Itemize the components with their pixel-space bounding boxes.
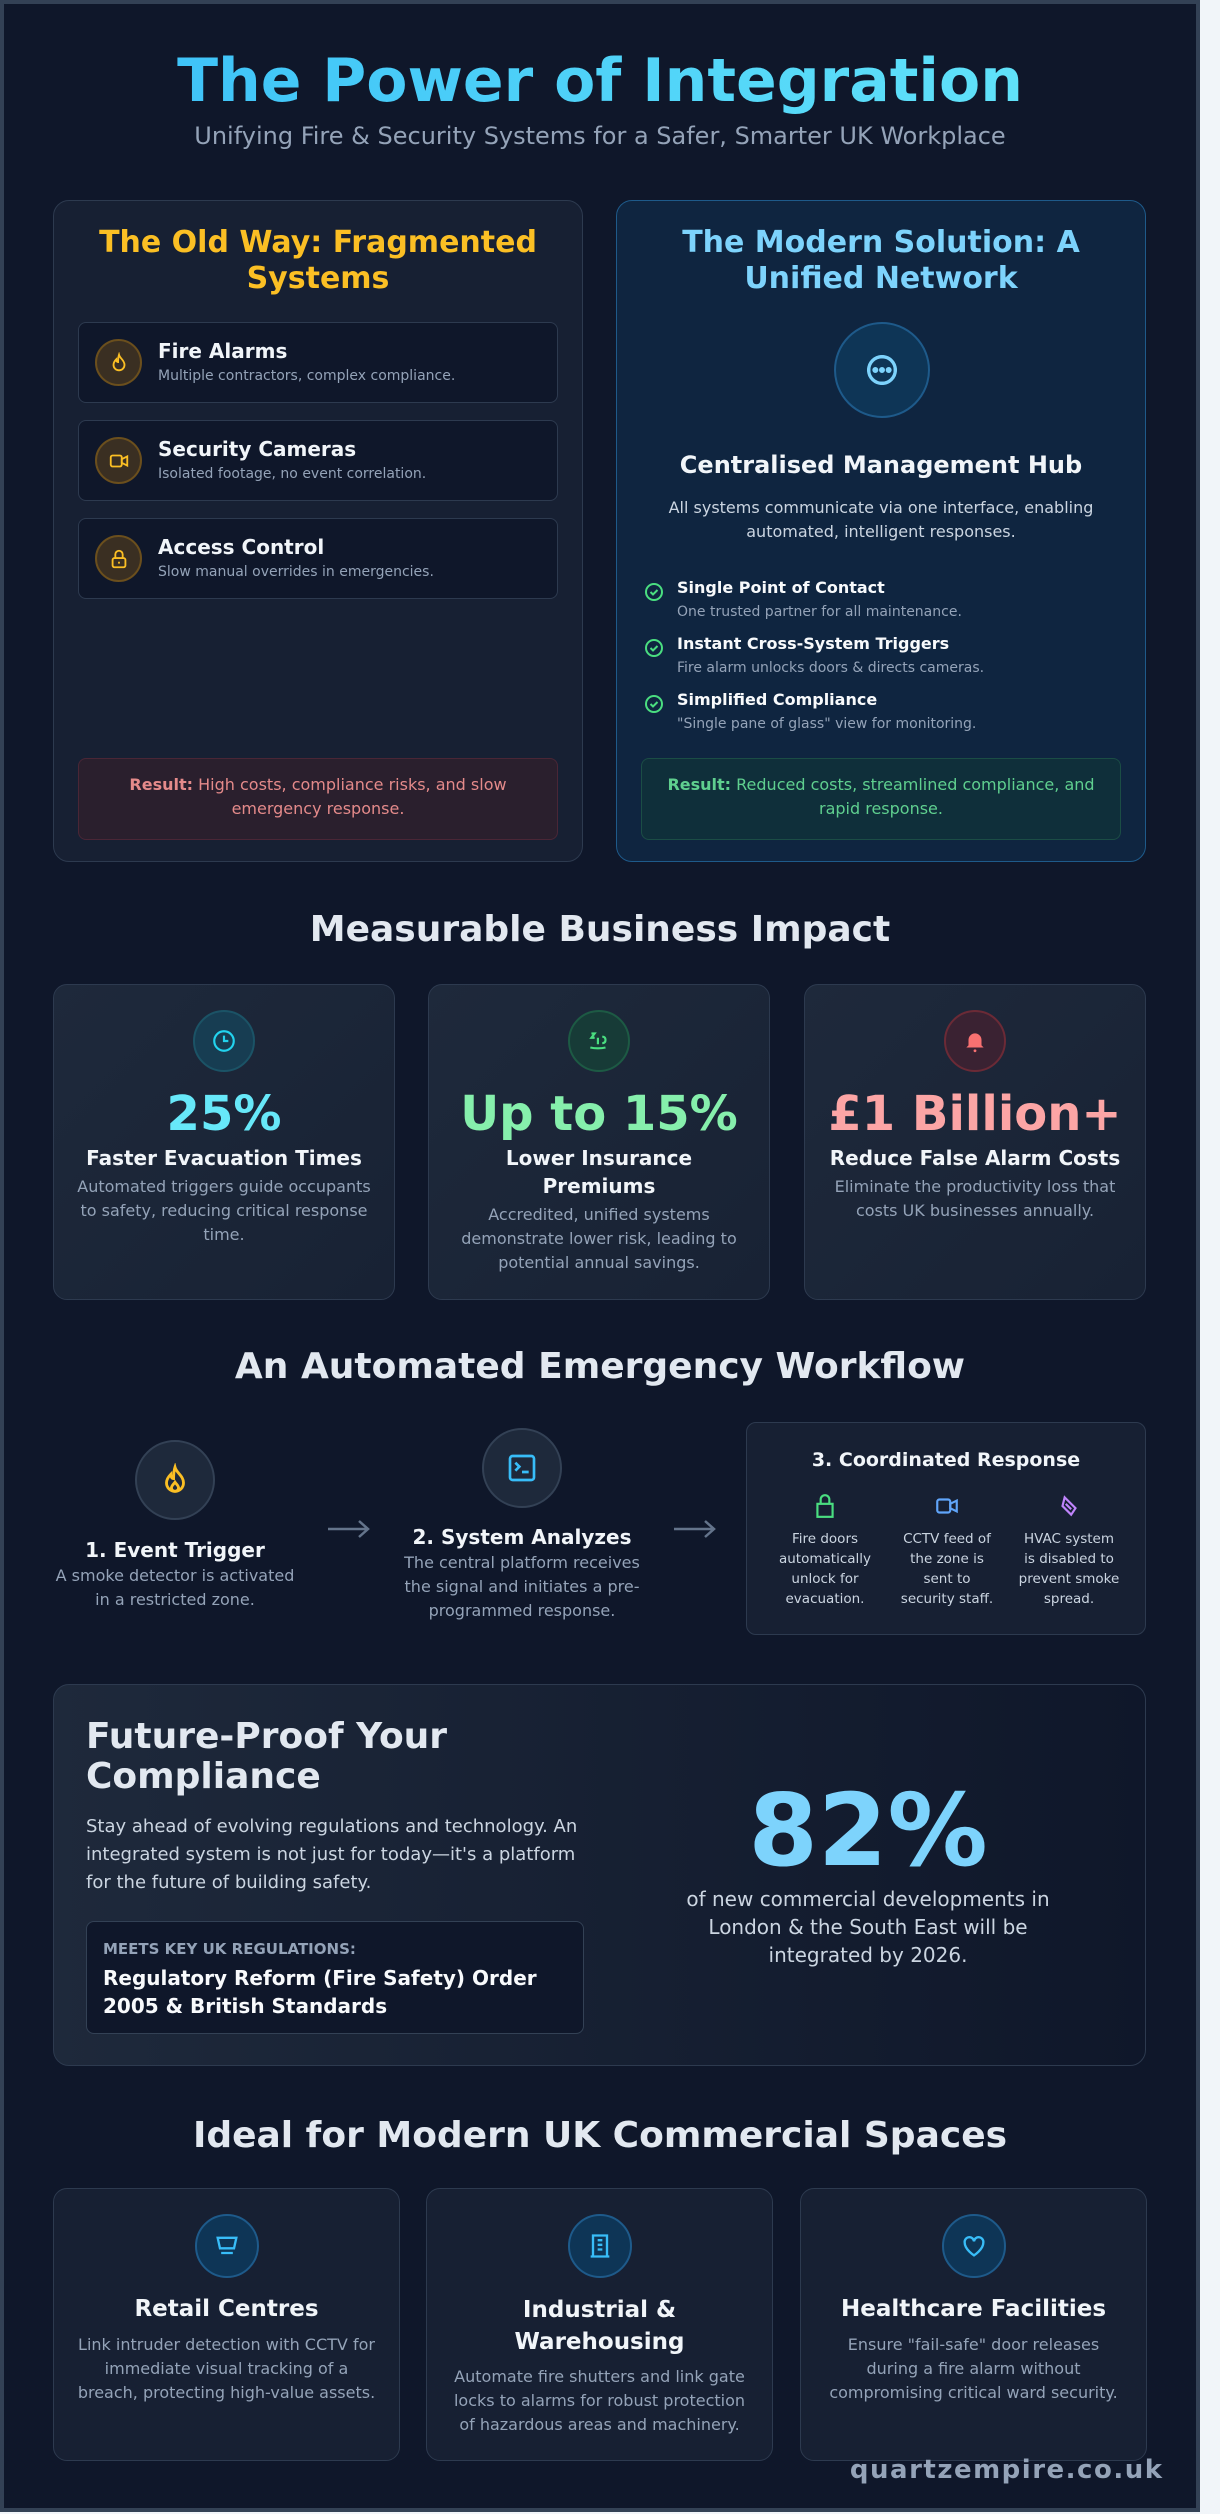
card: insurance [428, 984, 770, 1300]
response: hvac: HVAC system [1024, 1531, 1114, 1547]
icon: heart [942, 2214, 1006, 2278]
item: security cameras: Security Cameras [158, 437, 356, 461]
card: insurance: potential annual savings. [498, 1253, 700, 1272]
compliance heading: Future-Proof Your [86, 1716, 447, 1757]
item: fire alarms: Fire Alarms [158, 339, 287, 363]
card: industrial: Warehousing [514, 2329, 684, 2355]
step 1: event trigger: A smoke detector is activated [56, 1566, 294, 1585]
panel: future-proof compliance [53, 1684, 1146, 2066]
heading: workflow: An Automated Emergency Workflow [235, 1346, 965, 1387]
result: old way: emergency response. [232, 799, 404, 818]
hub description [668, 498, 1093, 541]
stat: 82%: London & the South East will be [708, 1915, 1028, 1939]
hub title: Centralised Management Hub [680, 451, 1082, 479]
compliance heading: Compliance [86, 1756, 321, 1797]
card: insurance: Up to 15% [460, 1086, 738, 1142]
check item 3: "Single pane of glass" view for monitoring. [677, 716, 976, 732]
arrow 1 [328, 1520, 370, 1538]
card: healthcare: Healthcare Facilities [841, 2296, 1106, 2322]
response: hvac: spread. [1044, 1591, 1094, 1607]
hub description: All systems communicate via one interface, enabling [669, 498, 1093, 517]
check item 1 [645, 578, 962, 620]
step 2: system analyzes: the signal and initiates a pre- [405, 1577, 639, 1596]
card: healthcare: Ensure "fail-safe" door releases [848, 2335, 1099, 2354]
response: cctv: the zone is [910, 1551, 984, 1567]
card: insurance: demonstrate lower risk, leading to [461, 1229, 737, 1248]
compliance paragraph: for the future of building safety. [86, 1872, 371, 1893]
check item 3 [645, 690, 976, 732]
panel: old way [53, 200, 583, 862]
card: evacuation [53, 984, 395, 1300]
response: doors [779, 1494, 871, 1607]
compliance paragraph: Stay ahead of evolving regulations and technology. An [86, 1816, 577, 1837]
item: security cameras [78, 420, 558, 501]
step 3: coordinated response [746, 1422, 1146, 1635]
response: doors: automatically [779, 1551, 871, 1567]
icon: building [568, 2214, 632, 2278]
response: cctv [901, 1498, 993, 1607]
item: access control: Access Control [158, 535, 324, 559]
icon: hub [834, 322, 930, 418]
compliance paragraph: integrated system is not just for today—it's a platform [86, 1844, 575, 1865]
card: industrial: of hazardous areas and machinery. [459, 2415, 740, 2434]
card: healthcare [800, 2188, 1147, 2461]
stat: 82%: integrated by 2026. [769, 1943, 967, 1967]
step 2: system analyzes: The central platform receives [404, 1553, 640, 1572]
check item 2: Fire alarm unlocks doors & directs cameras. [677, 660, 984, 676]
title: The Power of Integration [177, 46, 1023, 116]
check item 2: Instant Cross-System Triggers [677, 634, 949, 653]
regulations box [86, 1921, 584, 2034]
title [0, 44, 1200, 118]
check item 3: Simplified Compliance [677, 690, 877, 709]
compliance heading [86, 1716, 447, 1797]
response: doors: Fire doors [792, 1531, 858, 1547]
card: insurance: Lower Insurance [506, 1146, 692, 1170]
panel: modern solution [616, 200, 1146, 862]
stat: 82% [686, 1772, 1050, 1967]
item: fire alarms: Multiple contractors, complex compliance. [158, 368, 455, 384]
icon: bell [944, 1010, 1006, 1072]
icon: camera [95, 437, 142, 484]
card: healthcare: during a fire alarm without [866, 2359, 1080, 2378]
card: retail: breach, protecting high-value assets. [78, 2383, 375, 2402]
icon: terminal [482, 1428, 562, 1508]
regulations box: MEETS KEY UK REGULATIONS: [103, 1940, 356, 1958]
card: insurance: Premiums [543, 1174, 655, 1198]
card: evacuation: Automated triggers guide occupants [77, 1177, 371, 1196]
modern heading: Unified Network [744, 261, 1018, 296]
card: false alarms: costs UK businesses annually. [856, 1201, 1094, 1220]
footer: website: quartzempire.co.uk [850, 2455, 1162, 2485]
modern heading: The Modern Solution: A [682, 225, 1080, 260]
card: evacuation: 25% [167, 1086, 281, 1142]
icon: flame [95, 339, 142, 386]
step 3: coordinated response: 3. Coordinated Response [812, 1449, 1080, 1471]
card: evacuation: time. [203, 1225, 245, 1244]
card: insurance: Accredited, unified systems [488, 1205, 710, 1224]
stat: 82%: of new commercial developments in [686, 1887, 1050, 1911]
card: false alarms: Eliminate the productivity loss that [835, 1177, 1115, 1196]
check item 1: One trusted partner for all maintenance. [677, 604, 962, 620]
card: industrial: locks to alarms for robust protection [454, 2391, 745, 2410]
step 1: event trigger: in a restricted zone. [95, 1590, 255, 1609]
response: hvac [1019, 1495, 1119, 1607]
card: healthcare: compromising critical ward security. [829, 2383, 1118, 2402]
card: retail [53, 2188, 400, 2461]
icon: fire [135, 1440, 215, 1520]
card: false alarms: Reduce False Alarm Costs [830, 1146, 1120, 1170]
response: doors: unlock for [791, 1571, 859, 1587]
icon: retail [195, 2214, 259, 2278]
old way heading [99, 225, 537, 296]
step 2: system analyzes: 2. System Analyzes [413, 1525, 631, 1549]
modern heading [682, 225, 1080, 296]
result: old way: Result: High costs, compliance risks, and slow [129, 775, 507, 794]
item: security cameras: Isolated footage, no event correlation. [158, 466, 426, 482]
response: cctv: sent to [923, 1571, 971, 1587]
card: evacuation: Faster Evacuation Times [86, 1146, 362, 1170]
item: fire alarms [78, 322, 558, 403]
compliance paragraph [86, 1816, 577, 1893]
check item 2 [645, 634, 984, 676]
result: modern: Result: Reduced costs, streamlined compliance, and [667, 775, 1095, 794]
response: cctv: CCTV feed of [903, 1531, 991, 1547]
card: retail: immediate visual tracking of a [105, 2359, 348, 2378]
card: false alarms: £1 Billion+ [828, 1086, 1122, 1142]
heading: commercial spaces: Ideal for Modern UK Commercial Spaces [193, 2115, 1007, 2156]
card: industrial: Industrial & [523, 2297, 676, 2323]
arrow 2 [674, 1520, 716, 1538]
card: evacuation: to safety, reducing critical response [80, 1201, 368, 1220]
result: modern: rapid response. [819, 799, 943, 818]
card: false alarms [804, 984, 1146, 1300]
old way heading: Systems [247, 261, 389, 296]
result: modern [641, 758, 1121, 840]
step 2: system analyzes [404, 1428, 640, 1620]
response: doors: evacuation. [786, 1591, 864, 1607]
result: old way [78, 758, 558, 840]
item: access control [78, 518, 558, 599]
response: hvac: is disabled to [1024, 1551, 1114, 1567]
card: industrial: Automate fire shutters and link gate [454, 2367, 745, 2386]
check item 1: Single Point of Contact [677, 578, 885, 597]
card: retail: Retail Centres [134, 2296, 319, 2322]
checklist [645, 578, 984, 732]
icon: lock [95, 535, 142, 582]
step 1: event trigger: 1. Event Trigger [85, 1538, 265, 1562]
heading: business impact: Measurable Business Impact [310, 909, 890, 950]
old way heading: The Old Way: Fragmented [99, 225, 537, 260]
step 1: event trigger [56, 1440, 294, 1609]
stat: 82%: 82% [748, 1772, 988, 1889]
card: retail: Link intruder detection with CCTV for [78, 2335, 375, 2354]
response: cctv: security staff. [901, 1591, 993, 1607]
subtitle: Unifying Fire & Security Systems for a Safer, Smarter UK Workplace [194, 122, 1006, 150]
regulations box: 2005 & British Standards [103, 1994, 387, 2018]
icon: clock [193, 1010, 255, 1072]
icon: money [568, 1010, 630, 1072]
hub description: automated, intelligent responses. [746, 522, 1016, 541]
regulations box: Regulatory Reform (Fire Safety) Order [103, 1966, 537, 1990]
step 2: system analyzes: programmed response. [429, 1601, 615, 1620]
item: access control: Slow manual overrides in emergencies. [158, 564, 434, 580]
card: industrial [426, 2188, 773, 2461]
response: hvac: prevent smoke [1019, 1571, 1119, 1587]
